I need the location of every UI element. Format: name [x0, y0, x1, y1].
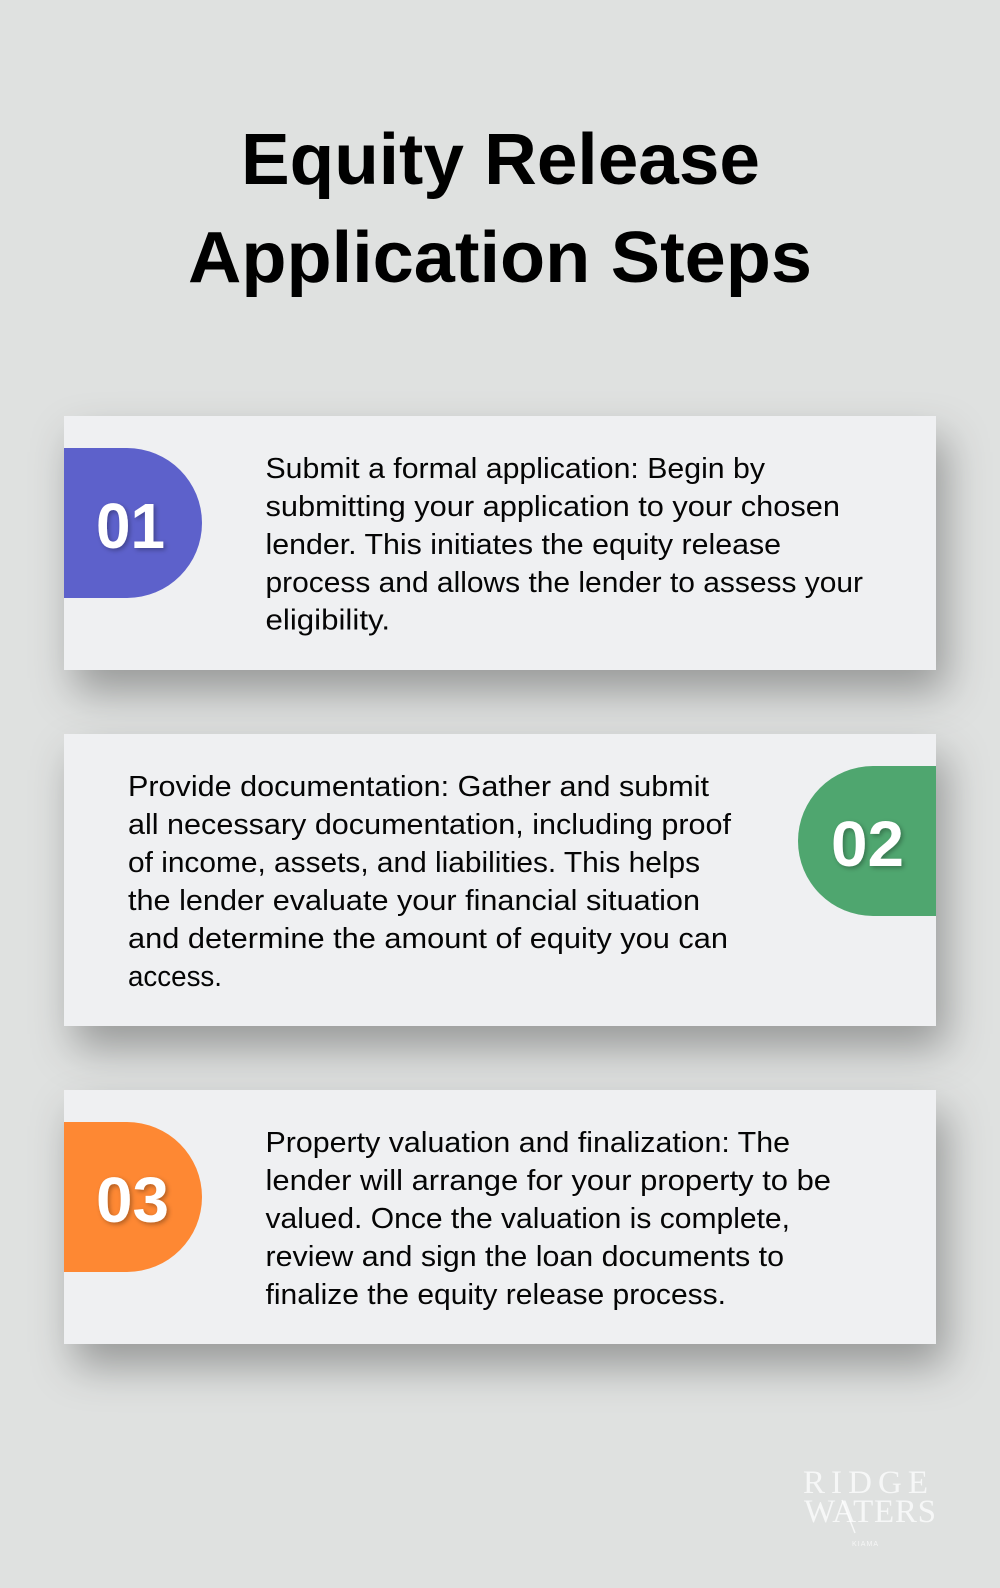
text: step 03: valued. Once the valuation is complete,: [266, 1203, 790, 1235]
text: step 02: access.: [128, 961, 222, 993]
card background 01: [64, 416, 936, 670]
text: step 01: Submit a formal application: Begin by: [266, 453, 766, 485]
text: step 03: review and sign the loan documents to: [266, 1241, 784, 1273]
logo: Ridge Waters Kiama: WATERS: [804, 1494, 936, 1530]
text: step 03: [266, 1127, 831, 1311]
title: Equity Release: [241, 120, 760, 200]
text: step 03: Property valuation and finalization: The: [266, 1127, 790, 1159]
text: step 02: the lender evaluate your financial situation: [128, 885, 700, 917]
text: step 02: Provide documentation: Gather and submit: [128, 771, 709, 803]
panel: step 02: [64, 734, 936, 1026]
text: step 03: finalize the equity release process.: [266, 1279, 726, 1311]
logo: Ridge Waters Kiama: KIAMA: [852, 1541, 878, 1548]
text: step 02: [128, 771, 731, 993]
text: step 03: lender will arrange for your property to be: [266, 1165, 831, 1197]
card background 03: [64, 1090, 936, 1344]
logo: Ridge Waters Kiama: [803, 1465, 936, 1548]
number 03: 03: [96, 1164, 169, 1236]
panel: step 01: [64, 416, 936, 670]
title: [188, 120, 812, 298]
text: step 01: eligibility.: [266, 604, 390, 636]
number 02: 02: [831, 808, 904, 880]
logo: Ridge Waters Kiama: RIDGE: [803, 1465, 928, 1501]
text: step 01: lender. This initiates the equity release: [266, 529, 781, 561]
badge 03: [64, 1122, 202, 1272]
badge 01: [64, 448, 202, 598]
text: step 02: all necessary documentation, including proof: [128, 809, 731, 841]
text: step 02: of income, assets, and liabilities. This helps: [128, 847, 700, 879]
number 01: 01: [96, 490, 165, 562]
text: step 01: submitting your application to your chosen: [266, 491, 840, 523]
card background 02: [64, 734, 936, 1026]
badge 02: [798, 766, 936, 916]
text: step 02: and determine the amount of equity you can: [128, 923, 728, 955]
text: step 01: [266, 453, 864, 636]
title: Application Steps: [188, 218, 812, 298]
text: step 01: process and allows the lender to assess your: [266, 567, 864, 599]
panel: step 03: [64, 1090, 936, 1344]
